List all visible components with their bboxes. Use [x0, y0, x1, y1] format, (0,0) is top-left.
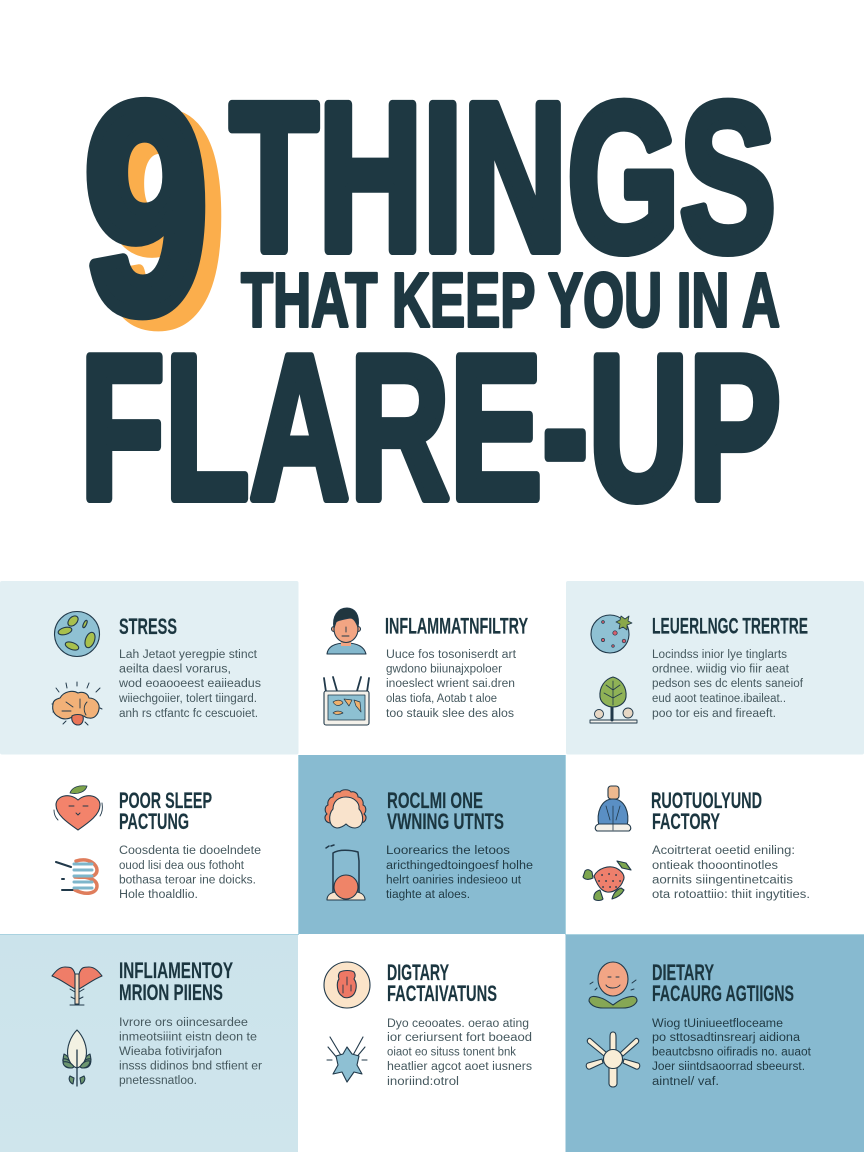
heading: DIGTARY — [387, 960, 449, 985]
text block: ontieak thooontinotles — [652, 860, 778, 872]
heading: ROCLMI ONE — [387, 788, 483, 813]
heading: INFLAMMATNFILTRY — [385, 614, 528, 638]
text block — [652, 1018, 812, 1088]
text block: po sttosadtinsrearj aidiona — [652, 1032, 801, 1044]
title numeral shadow: 9 — [100, 54, 224, 385]
icon: berry sphere — [591, 615, 632, 653]
text block — [386, 845, 533, 901]
panel: inflammatory — [324, 608, 528, 725]
panel: rocl one — [325, 788, 533, 901]
text block: ordnee. wiidig vio fiir aeat — [652, 664, 790, 676]
heading: PACTUNG — [119, 809, 189, 834]
text block: pedson ses dc elents saneiof — [652, 678, 804, 690]
heading: STRESS — [119, 614, 177, 639]
title numeral: 9 — [84, 43, 208, 374]
text block — [387, 1018, 532, 1088]
text block: heatlier agcot aoet iusners — [387, 1061, 532, 1073]
text block: too stauik slee des alos — [386, 708, 514, 720]
text block — [386, 649, 517, 720]
text block: aeilta daesl vorarus, — [119, 664, 231, 676]
text block: Hole thoaldlio. — [119, 889, 198, 901]
icon: curly hair head — [325, 790, 366, 828]
text block: anh rs ctfantc fc cescuoiet. — [119, 708, 258, 720]
text block: oiaot eo situss tonent bnk — [387, 1046, 516, 1058]
heading: INFLIAMENTOY — [119, 958, 233, 983]
heading — [651, 788, 762, 834]
text block: inmeotsiiint eistn deon te — [119, 1032, 257, 1044]
icon: stressed brain — [52, 682, 102, 725]
text block: insss didinos bnd stfient er — [119, 1060, 262, 1072]
panel: inflamentoy — [52, 958, 262, 1087]
icon: globe with leaves — [54, 612, 100, 656]
text block: poo tor eis and fireaeft. — [652, 708, 776, 720]
icon: strawberry — [583, 861, 631, 900]
icon: head in frame — [326, 845, 365, 900]
text block: wod eoaooeest eaiieadus — [118, 678, 261, 690]
icon: radiating hand — [586, 1032, 640, 1087]
text block: ior ceriursent fort boeaod — [387, 1032, 532, 1044]
heading: RUOTUOLYUND — [651, 788, 762, 813]
icon: lungs — [52, 967, 102, 1005]
icon: dna coil — [56, 860, 97, 893]
icon: monitor with map — [324, 677, 369, 725]
text block: Loorearics the letoos — [386, 845, 510, 857]
text block: Dyo ceooates. oerao ating — [387, 1018, 529, 1030]
text block: ouod lisi dea ous fothoht — [119, 860, 245, 872]
text block: Acoitrterat oeetid eniling: — [652, 845, 795, 857]
panel: leuerlngc trertre — [590, 614, 808, 723]
text block: Lah Jetaot yeregpie stinct — [119, 649, 258, 661]
text block: Coosdenta tie dooelndete — [119, 845, 261, 857]
text block: Ivrore ors oiincesardee — [119, 1017, 248, 1029]
icon: plant — [63, 1030, 91, 1086]
panel: dietary facaurg agtiigns — [586, 960, 812, 1088]
text block: aornits siingentinetcaitis — [652, 874, 793, 886]
text block: Wieaba fotivirjafon — [119, 1046, 222, 1058]
text block: Locindss inior lye tinglarts — [652, 649, 787, 661]
icon: tree — [590, 677, 637, 723]
heading: FACTORY — [652, 809, 720, 834]
heading — [387, 960, 497, 1006]
heading: POOR SLEEP — [119, 788, 212, 813]
panel: digtary factaivatuns — [324, 960, 532, 1088]
text block: bothasa teroar ine doicks. — [119, 874, 256, 886]
text block — [119, 845, 261, 901]
text block: gwdono biiunajxpoloer — [386, 664, 502, 676]
text block: ota rotoattiio: thiit ingytities. — [652, 889, 810, 901]
text block: eud aoot teatinoe.ibaileat.. — [652, 693, 786, 705]
icon: smiling face in leaves — [589, 962, 637, 1008]
title — [80, 43, 781, 542]
heading — [387, 788, 504, 834]
icon: person — [327, 608, 366, 654]
panel: poor sleep — [54, 786, 261, 901]
panel: factory — [583, 786, 810, 901]
heading: VWNING UTNTS — [387, 809, 504, 834]
text block: Joer siintdsaoorrad sbeeurst. — [652, 1061, 805, 1073]
text block — [652, 845, 810, 901]
icon: meditating person — [595, 786, 631, 831]
text block: beautcbsno oifiradis no. auaot — [652, 1046, 812, 1058]
text block: aricthingedtoingoesf holhe — [386, 860, 533, 872]
text block — [119, 1017, 262, 1087]
heading: MRION PIIENS — [119, 980, 223, 1005]
text block: aintnel/ vaf. — [652, 1076, 719, 1088]
text block: Uuce fos tosoniserdt art — [386, 649, 517, 661]
text block — [652, 649, 804, 720]
text block: inoriind:otrol — [387, 1076, 459, 1088]
text block: wiiechgoiier, tolert tiingard. — [118, 693, 257, 705]
heading — [119, 788, 212, 834]
text block — [118, 649, 261, 720]
text block: helrt oaniries indesieoo ut — [386, 874, 522, 886]
text block: pnetessnatloo. — [119, 1075, 197, 1087]
icon: heart apple — [54, 786, 102, 830]
heading — [119, 958, 233, 1005]
text block: Wiog tUiniueetfloceame — [652, 1018, 783, 1030]
text block: inoeslect wrient sai.dren — [386, 678, 515, 690]
panel: stress — [52, 612, 261, 725]
icon: spiked star — [327, 1037, 367, 1082]
heading: DIETARY — [652, 960, 714, 985]
text block: olas tiofa, Aotab t aloe — [386, 693, 497, 705]
heading — [652, 960, 794, 1006]
heading: FACTAIVATUNS — [387, 981, 497, 1006]
panel: card backgrounds — [0, 581, 864, 1152]
text block: tiaghte at aloes. — [386, 889, 470, 901]
icon: heart in circle — [324, 962, 370, 1008]
